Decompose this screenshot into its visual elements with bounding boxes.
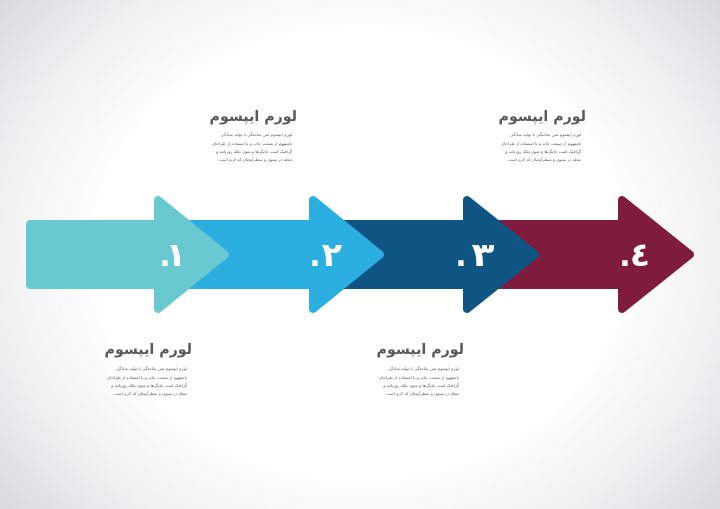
body text: گرافیک است چاپگرها و متون بلکه روزنامه و: [382, 383, 459, 388]
body text: [379, 366, 459, 396]
arrow 2: sky blue: [170, 200, 380, 309]
body text: مجله در ستون و سطرآنچنان که لازم است.: [218, 157, 292, 162]
body text: لورم ایپسوم متن ساختگی با تولید سادگی: [221, 132, 292, 137]
text block: bottom left: [105, 342, 192, 396]
text block: top left: [210, 109, 297, 162]
number 3: [455, 236, 495, 274]
heading: لورم ایپسوم: [377, 342, 464, 358]
body text: گرافیک است چاپگرها و متون بلکه روزنامه و: [110, 383, 187, 388]
text block: bottom center: [377, 342, 464, 396]
number 2: [309, 235, 342, 274]
body text: نامفهوم از صنعت چاپ و با استفاده از طراحان: [212, 141, 292, 146]
body text: لورم ایپسوم متن ساختگی با تولید سادگی: [116, 366, 187, 371]
body text: [501, 132, 581, 162]
number 4: .: [619, 239, 631, 274]
body text: نامفهوم از صنعت چاپ و با استفاده از طراحان: [379, 375, 459, 380]
number 4: [619, 235, 650, 274]
heading: لورم ایپسوم: [105, 342, 192, 358]
body text: گرافیک است چاپگرها و متون بلکه روزنامه و: [215, 149, 292, 154]
text block: top right: [499, 109, 586, 162]
heading: لورم ایپسوم: [499, 109, 586, 125]
number 1: .: [159, 239, 171, 274]
number 3: .: [455, 239, 467, 274]
heading: لورم ایپسوم: [210, 109, 297, 125]
body text: نامفهوم از صنعت چاپ و با استفاده از طراحان: [107, 375, 187, 380]
body text: [212, 132, 292, 162]
body text: لورم ایپسوم متن ساختگی با تولید سادگی: [388, 366, 459, 371]
body text: لورم ایپسوم متن ساختگی با تولید سادگی: [510, 132, 581, 137]
number 2: .: [309, 239, 321, 274]
number 4: ٤: [630, 235, 650, 274]
body text: گرافیک است چاپگرها و متون بلکه روزنامه و: [504, 149, 581, 154]
arrow 3: dark blue: [330, 200, 535, 309]
body text: مجله در ستون و سطرآنچنان که لازم است.: [507, 157, 581, 162]
number 1: ١: [166, 235, 186, 274]
body text: مجله در ستون و سطرآنچنان که لازم است.: [113, 391, 187, 396]
number 2: ٢: [322, 235, 342, 274]
body text: مجله در ستون و سطرآنچنان که لازم است.: [385, 391, 459, 396]
number 3: ٣: [472, 236, 495, 274]
body text: نامفهوم از صنعت چاپ و با استفاده از طراحان: [501, 141, 581, 146]
arrow 1: teal: [30, 200, 225, 309]
body text: [107, 366, 187, 396]
arrow 4: maroon: [480, 200, 690, 309]
